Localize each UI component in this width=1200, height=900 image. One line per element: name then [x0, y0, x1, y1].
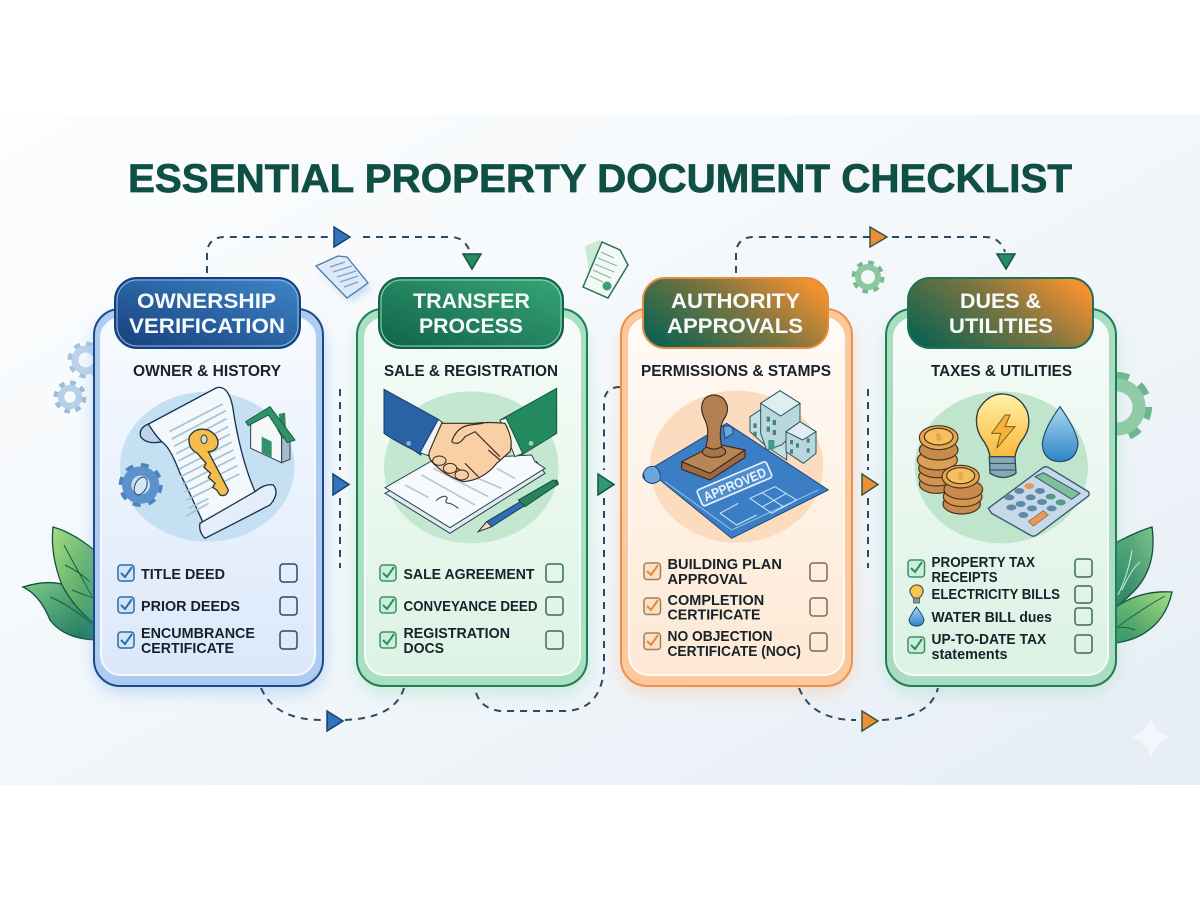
item: up-to-date tax statements: UP-TO-DATE TAX [932, 631, 1046, 648]
icon: left leaves [23, 527, 100, 640]
icon: sparkle [1131, 717, 1172, 758]
item: building plan approval: APPROVAL [668, 571, 747, 588]
badge: OWNERSHIP [137, 290, 276, 313]
item: completion certificate [644, 592, 827, 624]
icon: left gears [56, 344, 102, 411]
item: conveyance deed: CONVEYANCE DEED [404, 598, 538, 615]
item: prior deeds: PRIOR DEEDS [141, 598, 240, 615]
arrow: transfer to authority, side and bottom [475, 387, 620, 711]
item: property tax receipts: PROPERTY TAX [932, 554, 1035, 571]
checklist [644, 556, 827, 660]
badge: UTILITIES [949, 315, 1053, 338]
badge: APPROVALS [667, 315, 803, 338]
illustration: coins bulb water drop calculator: $ [958, 471, 964, 482]
illustration: approval stamp on blueprint [643, 391, 828, 543]
subheading: TAXES & UTILITIES [931, 363, 1072, 380]
item: sale agreement [380, 564, 563, 583]
badge [379, 278, 563, 348]
background band [0, 115, 1200, 785]
badge: PROCESS [419, 315, 523, 338]
panel: dues and utilities [884, 278, 1118, 694]
illustration: coins bulb water drop calculator [915, 391, 1089, 543]
subheading: SALE & REGISTRATION [384, 363, 558, 380]
arrow: ownership to transfer, bottom [261, 688, 404, 731]
panel: authority approvals [619, 278, 854, 694]
badge [115, 278, 300, 348]
item: title deed [118, 564, 297, 583]
item: encumbrance certificate: CERTIFICATE [141, 640, 234, 657]
title: ESSENTIAL PROPERTY DOCUMENT CHECKLIST [128, 157, 1072, 201]
icon: right gear [1086, 376, 1148, 438]
badge: VERIFICATION [129, 315, 285, 338]
item: no objection certificate: CERTIFICATE (NOC) [668, 643, 801, 660]
item: water bill dues: WATER BILL dues [932, 609, 1052, 626]
checklist [118, 564, 297, 657]
item: building plan approval [644, 556, 827, 588]
item: up-to-date tax statements: statements [932, 646, 1008, 663]
icon: floating document green [583, 240, 628, 298]
panel: ownership verification [92, 278, 326, 694]
connector: ownership to transfer, top [207, 227, 481, 273]
item: water bill dues [909, 607, 1092, 626]
illustration: deed scroll with key and house [120, 387, 295, 542]
item: completion certificate: CERTIFICATE [668, 606, 760, 624]
connector: authority to dues, top [736, 227, 1015, 273]
item: sale agreement: SALE AGREEMENT [404, 566, 534, 583]
illustration: handshake over contract [384, 388, 559, 543]
panel: transfer process [355, 278, 589, 694]
illustration: coins bulb water drop calculator: $ [936, 432, 942, 443]
item: property tax receipts: RECEIPTS [932, 569, 998, 586]
illustration: approval stamp on blueprint: APPROVED [701, 464, 769, 504]
item: completion certificate: COMPLETION [668, 592, 764, 609]
badge: AUTHORITY [671, 290, 800, 313]
item: no objection certificate: NO OBJECTION [668, 628, 772, 645]
badge: DUES & [960, 290, 1041, 313]
item: no objection certificate [644, 628, 827, 660]
checklist [908, 554, 1092, 663]
subheading: OWNER & HISTORY [133, 363, 281, 380]
item: registration docs [380, 625, 563, 657]
icon: right leaves [1110, 527, 1172, 644]
subheading: PERMISSIONS & STAMPS [641, 363, 831, 380]
item: building plan approval: BUILDING PLAN [668, 556, 782, 573]
item: prior deeds [118, 597, 297, 615]
item: registration docs: REGISTRATION [404, 625, 510, 642]
arrow: ownership to transfer, side [333, 389, 349, 568]
icon: green gear top [854, 263, 882, 291]
arrow: authority to dues, side [862, 389, 878, 568]
item: electricity bills: ELECTRICITY BILLS [932, 586, 1060, 603]
item: encumbrance certificate [118, 625, 297, 657]
arrow: authority to dues, bottom [799, 688, 938, 731]
item: title deed: TITLE DEED [141, 566, 225, 583]
item: property tax receipts [908, 554, 1092, 586]
badge [908, 278, 1093, 348]
badge: TRANSFER [413, 290, 530, 313]
item: registration docs: DOCS [404, 640, 444, 657]
badge [643, 278, 828, 348]
checklist [380, 564, 563, 657]
item: encumbrance certificate: ENCUMBRANCE [141, 625, 255, 642]
icon: floating document blue [316, 256, 372, 302]
item: up-to-date tax statements [908, 631, 1092, 663]
